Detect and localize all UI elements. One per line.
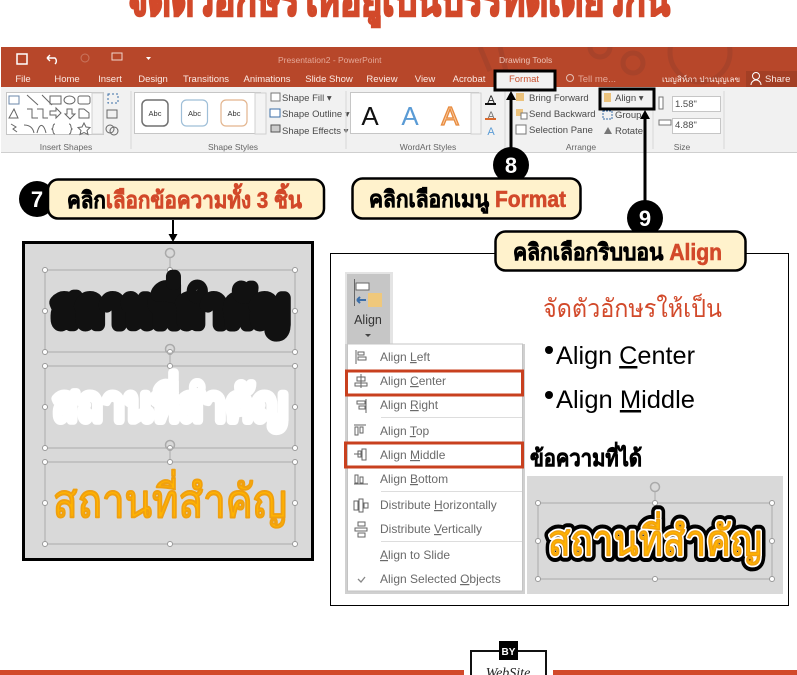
orange layer with handles <box>42 440 298 546</box>
callout: step 7 <box>48 180 324 218</box>
PowerPoint ribbon screenshot: Format <box>509 74 539 85</box>
size group <box>659 96 720 134</box>
menu icons <box>354 350 368 537</box>
step 7 badge <box>19 181 55 217</box>
align dropdown menu: Align Top <box>380 424 429 438</box>
result preview <box>527 476 783 594</box>
align button: Align <box>354 313 382 327</box>
arrow: step 9 to Align <box>640 110 650 205</box>
wordart styles: A <box>487 126 495 138</box>
arrange group: Selection Pane <box>529 125 593 136</box>
arrange group <box>516 93 644 137</box>
arrange group: Send Backward <box>529 109 596 120</box>
shape styles: Shape Effects ▾ <box>282 126 349 137</box>
PowerPoint ribbon screenshot: View <box>415 74 435 85</box>
align dropdown menu: Align Center <box>380 374 446 388</box>
highlight: Format tab <box>495 71 555 90</box>
panel: three text layers <box>24 242 312 560</box>
heading: set text as: จัดตัวอักษรให้เป็น <box>543 293 722 323</box>
shapes gallery <box>6 92 104 134</box>
result preview: สถานที่สำคัญ <box>548 512 762 565</box>
highlight: Align Center <box>346 371 522 395</box>
wordart styles: A <box>487 110 495 122</box>
callout: step 9: คลิกเลือกริบบอน Align <box>513 239 722 265</box>
white layer with handles: สถานที่สำคัญ <box>53 372 287 430</box>
ribbon group labels: Insert Shapes <box>40 142 92 152</box>
bullet list: Align Middle <box>556 386 695 414</box>
bullet list: Align Center <box>556 342 695 370</box>
panel: align instructions <box>330 254 788 606</box>
ribbon group labels: Size <box>674 142 691 152</box>
PowerPoint ribbon screenshot: Review <box>366 74 398 85</box>
wordart styles: A <box>487 94 495 106</box>
arrange group: Bring Forward <box>529 93 589 104</box>
wordart styles: A <box>401 101 419 131</box>
shape styles: Shape Outline ▾ <box>282 109 350 120</box>
align dropdown menu: Align Left <box>380 350 431 364</box>
align dropdown menu <box>345 344 525 594</box>
black layer with handles: สถานที่สำคัญ <box>53 276 287 334</box>
callout: step 8: คลิกเลือกเมนู Format <box>369 186 566 214</box>
PowerPoint ribbon screenshot: เบญสิห์ภา ปานบุญเลข <box>662 74 740 84</box>
PowerPoint ribbon screenshot: Transitions <box>183 74 229 85</box>
highlight: Align button <box>600 89 654 109</box>
highlight: Align Middle <box>346 443 522 467</box>
align dropdown menu: Align Middle <box>380 448 446 462</box>
arrange group: Align ▾ <box>615 93 644 104</box>
wordart styles <box>350 92 496 138</box>
footer bars <box>0 670 797 675</box>
PowerPoint ribbon screenshot: Acrobat <box>453 74 486 85</box>
footer logo: BY <box>502 647 516 658</box>
PowerPoint ribbon screenshot: Insert <box>98 74 122 85</box>
arrange group: Group <box>615 110 641 121</box>
PowerPoint ribbon screenshot <box>1 47 797 153</box>
shape styles: Abc <box>149 109 162 118</box>
align dropdown menu: Distribute Horizontally <box>380 498 497 512</box>
shape styles: Abc <box>188 109 201 118</box>
ribbon group labels: Arrange <box>566 142 596 152</box>
black layer with handles <box>42 248 298 354</box>
shape styles: Shape Fill ▾ <box>282 93 332 104</box>
align dropdown menu: Distribute Vertically <box>380 522 482 536</box>
orange layer with handles: สถานที่สำคัญ <box>53 469 287 527</box>
callout: step 7: คลิกเลือกข้อความทั้ง 3 ชิ้น <box>67 183 302 213</box>
bullet list <box>545 342 695 414</box>
arrow: step 8 to Format <box>506 91 516 150</box>
PowerPoint ribbon screenshot: Home <box>54 74 80 85</box>
size group: 1.58" <box>675 99 697 110</box>
arrow: step 7 down to panel <box>168 220 178 242</box>
align dropdown menu: Align Selected Objects <box>380 572 501 586</box>
shape edit icons <box>106 94 118 135</box>
PowerPoint ribbon screenshot: File <box>15 74 31 85</box>
ribbon group labels <box>40 91 724 152</box>
PowerPoint ribbon screenshot: Tell me... <box>578 74 616 85</box>
align dropdown menu: Align Bottom <box>380 472 448 486</box>
PowerPoint ribbon screenshot: Share <box>765 74 790 85</box>
footer logo <box>471 641 546 675</box>
size group: 4.88" <box>675 120 697 131</box>
shape styles <box>134 92 350 137</box>
step 8 badge: 8 <box>505 153 517 178</box>
PowerPoint ribbon screenshot: Design <box>138 74 168 85</box>
PowerPoint ribbon screenshot: Slide Show <box>305 74 353 85</box>
result preview: สถานที่สำคัญ <box>548 512 762 565</box>
step 9 badge: 9 <box>639 206 651 231</box>
PowerPoint ribbon screenshot: Presentation2 - PowerPoint <box>278 55 382 65</box>
white layer with handles <box>42 344 298 450</box>
align dropdown menu: Align Right <box>380 398 439 412</box>
heading: result: ข้อความที่ได้ <box>530 441 642 471</box>
result preview: สถานที่สำคัญ <box>548 512 762 565</box>
wordart styles: A <box>441 101 459 131</box>
ribbon group labels: WordArt Styles <box>400 142 456 152</box>
align button <box>345 272 393 346</box>
step 7 badge: 7 <box>31 187 43 212</box>
step 9 badge <box>627 200 663 236</box>
callout: step 8 <box>352 178 580 218</box>
shape styles: Abc <box>228 109 241 118</box>
arrange group: Rotate <box>615 126 643 137</box>
step 8 badge <box>493 147 529 183</box>
callout: step 9 <box>496 232 746 270</box>
wordart styles: A <box>361 101 379 131</box>
align dropdown menu: Align to Slide <box>380 548 450 562</box>
PowerPoint ribbon screenshot: Drawing Tools <box>499 55 552 65</box>
PowerPoint ribbon screenshot: Animations <box>244 74 291 85</box>
ribbon group labels: Shape Styles <box>208 142 258 152</box>
